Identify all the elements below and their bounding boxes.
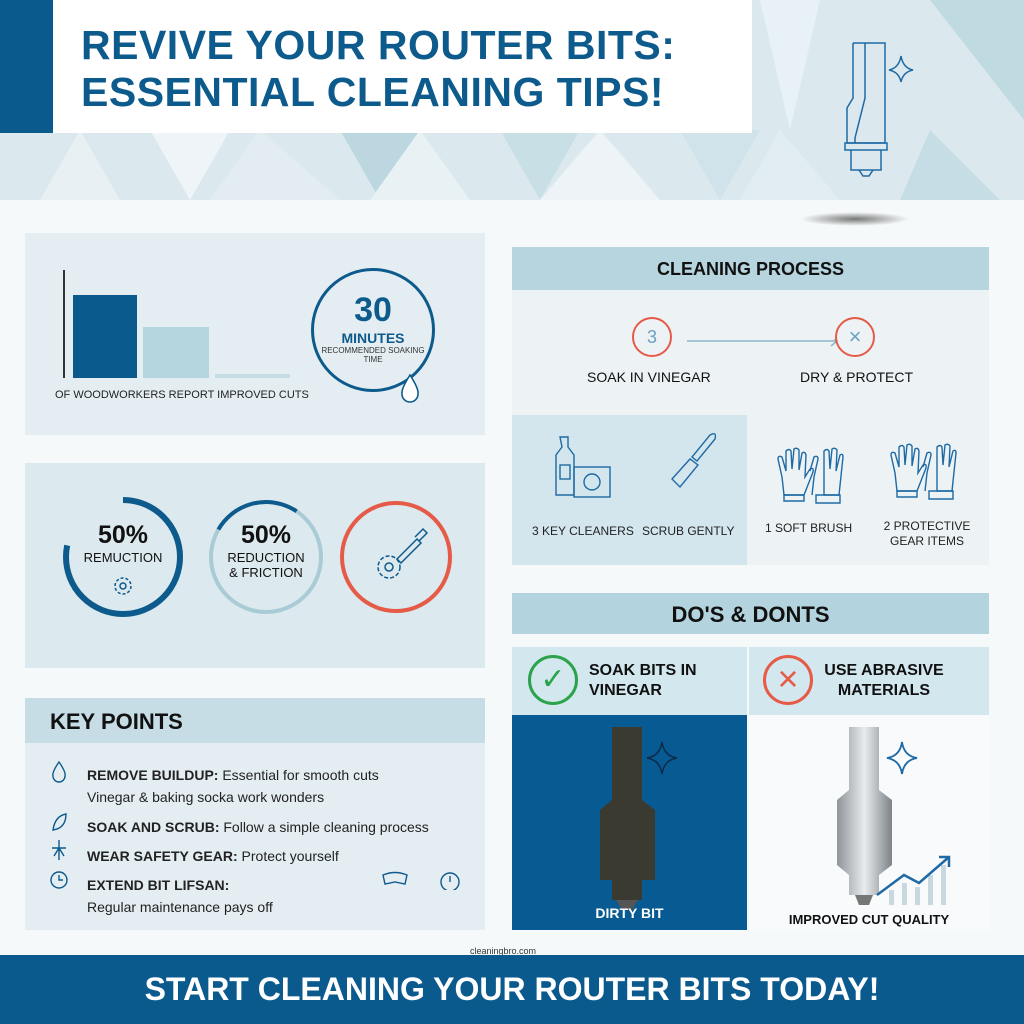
stat circle: 30 minutes: TIME xyxy=(363,355,383,364)
step: soak xyxy=(632,317,672,357)
heading xyxy=(25,698,485,743)
panel: cleaning process xyxy=(512,247,989,565)
panel: key points xyxy=(25,698,485,930)
panel: do's and donts xyxy=(512,593,989,930)
step labels: SOAK IN VINEGAR xyxy=(587,369,711,385)
list xyxy=(87,767,429,915)
stat circle: 30 minutes: 30 xyxy=(354,291,392,329)
heading: CLEANING PROCESS xyxy=(657,259,844,279)
shadow xyxy=(800,212,910,226)
list: REMOVE BUILDUP: Essential for smooth cuts xyxy=(87,767,379,783)
list: WEAR SAFETY GEAR: Protect yourself xyxy=(87,848,339,864)
list: EXTEND BIT LIFSAN: xyxy=(87,877,229,893)
stat: 50% reduction: REMUCTION xyxy=(84,550,162,565)
website label: cleaningbro.com xyxy=(470,946,536,956)
title bar accent xyxy=(0,0,53,133)
tool labels: 3 KEY CLEANERS xyxy=(532,524,634,538)
footer banner: START CLEANING YOUR ROUTER BITS TODAY! xyxy=(145,971,879,1007)
list: Vinegar & baking socka work wonders xyxy=(87,789,324,805)
heading xyxy=(512,593,989,634)
icons xyxy=(50,760,460,890)
stat circle: 30 minutes xyxy=(311,268,435,392)
stat: 50% friction: 50% xyxy=(241,521,291,549)
header background pattern xyxy=(0,0,1024,200)
dont xyxy=(749,647,989,715)
icon: router bit outline xyxy=(844,42,914,177)
clean bit xyxy=(749,715,989,930)
panel: stats bar chart xyxy=(25,233,485,435)
stat circle: 30 minutes: RECOMMENDED SOAKING xyxy=(321,346,425,355)
title: ESSENTIAL CLEANING TIPS! xyxy=(81,69,664,115)
panel: cleaning process: 1 SOFT BRUSH xyxy=(765,521,852,535)
step: soak: 3 xyxy=(647,327,657,347)
list: SOAK AND SCRUB: Follow a simple cleaning process xyxy=(87,819,429,835)
step: dry: × xyxy=(849,324,861,349)
stat: 50% friction xyxy=(227,521,305,580)
panel: cleaning process: DRY & PROTECT xyxy=(800,369,913,385)
do: ✓ xyxy=(540,663,566,696)
stat: 50% reduction: 50% xyxy=(98,521,148,549)
chart caption: OF WOODWORKERS REPORT IMPROVED CUTS xyxy=(55,389,309,401)
title: REVIVE YOUR ROUTER BITS: xyxy=(81,22,675,68)
heading: KEY POINTS xyxy=(50,709,183,734)
panel: reduction circles xyxy=(25,463,485,668)
do: VINEGAR xyxy=(589,682,662,699)
do xyxy=(512,647,747,715)
icon: water drop xyxy=(401,374,419,403)
footer banner xyxy=(0,955,1024,1024)
arrow xyxy=(687,339,838,346)
heading xyxy=(512,247,989,290)
dont: USE ABRASIVE MATERIALS xyxy=(824,662,944,699)
tools area xyxy=(512,415,747,565)
title xyxy=(53,0,752,133)
list: Regular maintenance pays off xyxy=(87,899,273,915)
stat: 50% reduction xyxy=(84,521,162,565)
step: dry xyxy=(835,317,875,357)
dont: × xyxy=(777,658,799,699)
bar chart xyxy=(63,270,290,378)
panel: cleaning process: SCRUB GENTLY xyxy=(642,524,734,538)
stat circle: 30 minutes: MINUTES xyxy=(342,330,404,346)
stat: 50% friction: & FRICTION xyxy=(229,565,303,580)
stat: 50% friction: REDUCTION xyxy=(227,550,305,565)
dirty bit: DIRTY BIT xyxy=(595,905,664,921)
dirty bit xyxy=(512,715,747,930)
clean bit: IMPROVED CUT QUALITY xyxy=(789,912,949,927)
heading: DO'S & DONTS xyxy=(671,602,830,627)
do: SOAK BITS IN xyxy=(589,662,697,679)
panel: cleaning process: 2 PROTECTIVE GEAR ITEMS xyxy=(884,519,970,548)
